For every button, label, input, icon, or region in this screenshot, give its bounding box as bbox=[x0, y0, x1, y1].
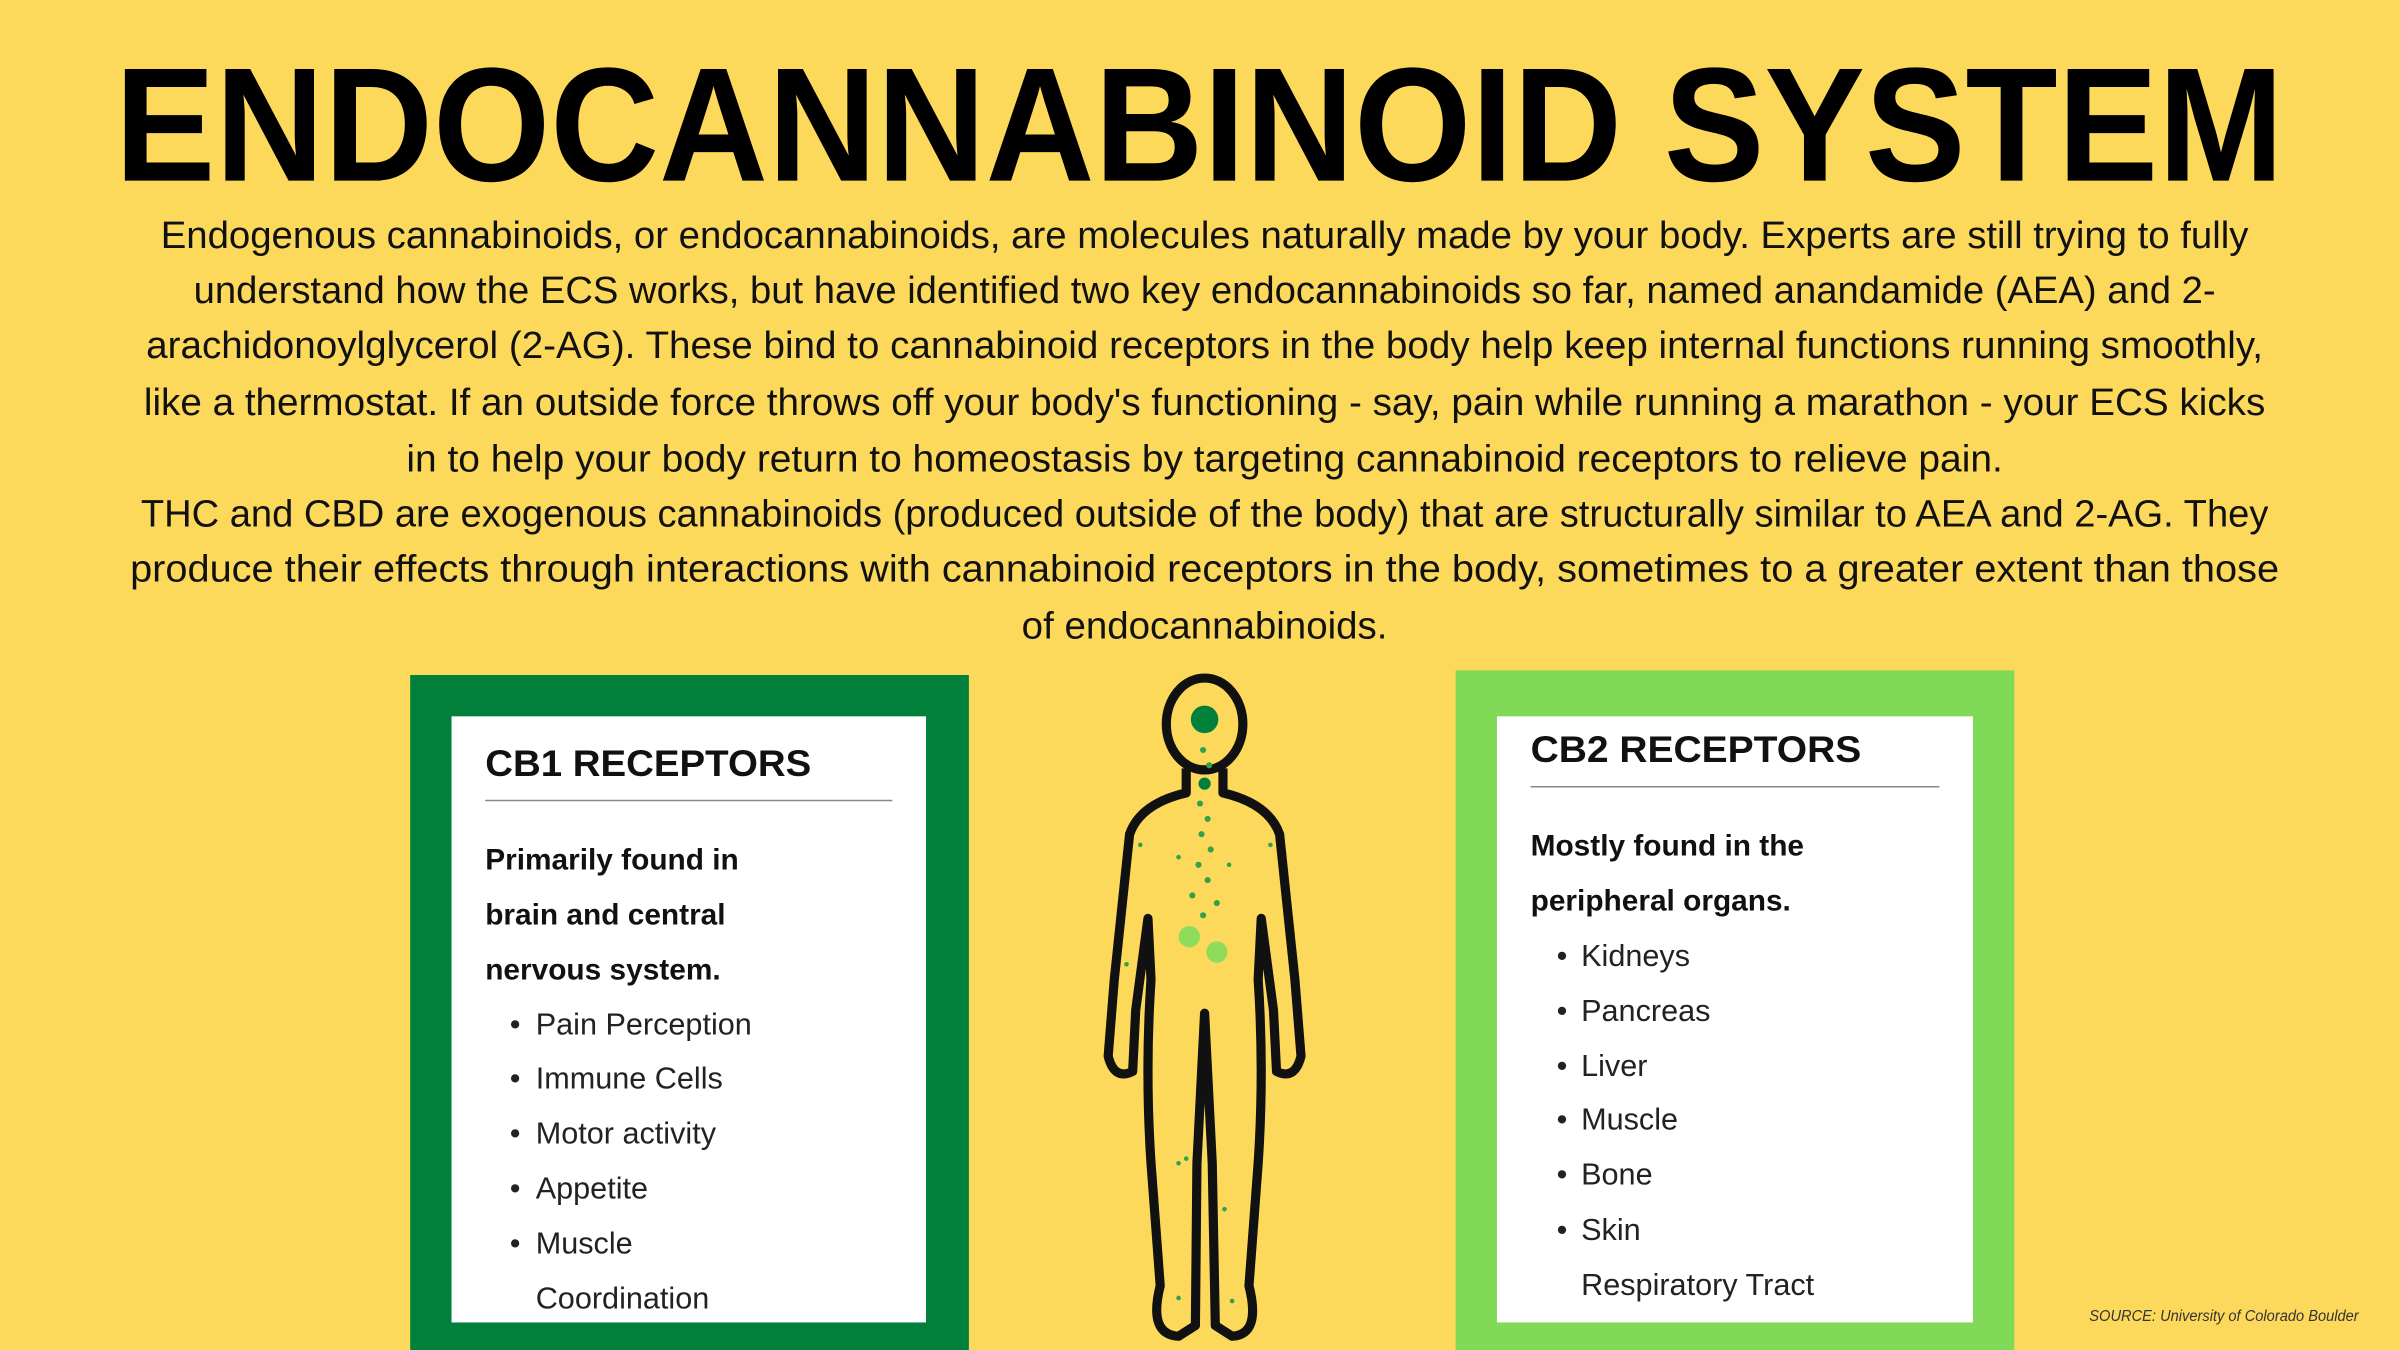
CB1 list: Immune Cells bbox=[536, 1061, 723, 1095]
CB1 list: • bbox=[510, 1061, 520, 1095]
heading: CB2: CB2 RECEPTORS bbox=[1531, 729, 1861, 770]
CB2 list: Bone bbox=[1581, 1158, 1653, 1192]
CB1 description: brain and central bbox=[485, 898, 726, 931]
CB2 list: Pancreas bbox=[1581, 994, 1710, 1028]
panel: CB1 receptors bbox=[410, 675, 969, 1350]
CB2 list: Liver bbox=[1581, 1049, 1647, 1083]
CB1 list: Muscle bbox=[536, 1227, 633, 1261]
CB1 list: • bbox=[510, 1227, 520, 1261]
CB2 list: Skin bbox=[1581, 1213, 1641, 1247]
CB2 list bbox=[1557, 939, 1815, 1302]
CB2 list: • bbox=[1557, 1049, 1567, 1083]
CB1 list: Motor activity bbox=[536, 1116, 717, 1150]
CB2 list: • bbox=[1557, 939, 1567, 973]
CB1 list: • bbox=[510, 1008, 520, 1042]
CB2 list: Kidneys bbox=[1581, 939, 1690, 973]
CB1 list: Pain Perception bbox=[536, 1008, 752, 1042]
CB2 list: • bbox=[1557, 994, 1567, 1028]
panel: CB2 receptors bbox=[1456, 670, 2014, 1350]
intro paragraph: produce their effects through interactions with cannabinoid receptors in the body, sometimes to a greater extent than those bbox=[130, 548, 2279, 591]
CB1 list: Coordination bbox=[536, 1282, 709, 1316]
CB1 list: Appetite bbox=[536, 1171, 648, 1205]
CB2 description: peripheral organs. bbox=[1531, 885, 1791, 918]
CB2 description bbox=[1531, 830, 1804, 918]
intro paragraph: arachidonoylglycerol (2-AG). These bind to cannabinoid receptors in the body help keep internal functions running smoothly, bbox=[146, 324, 2263, 367]
CB2 list: • bbox=[1557, 1103, 1567, 1137]
CB2 list: Respiratory Tract bbox=[1581, 1268, 1815, 1302]
title: ENDOCANNABINOID SYSTEM bbox=[115, 35, 2284, 216]
icon: human body bbox=[1108, 678, 1301, 1336]
intro paragraph: understand how the ECS works, but have identified two key endocannabinoids so far, named anandamide (AEA) and 2- bbox=[194, 269, 2216, 312]
intro paragraph: Endogenous cannabinoids, or endocannabinoids, are molecules naturally made by your body. Experts are still trying to fully bbox=[161, 214, 2249, 257]
CB2 description: Mostly found in the bbox=[1531, 830, 1804, 863]
CB1 list: • bbox=[510, 1116, 520, 1150]
intro paragraph: of endocannabinoids. bbox=[1022, 604, 1387, 647]
CB1 list: • bbox=[510, 1171, 520, 1205]
CB1 list bbox=[510, 1008, 752, 1316]
heading: CB1: CB1 RECEPTORS bbox=[485, 743, 811, 784]
intro paragraph: like a thermostat. If an outside force throws off your body's functioning - say, pain while running a marathon - your ECS kicks bbox=[144, 381, 2265, 424]
CB2 list: Muscle bbox=[1581, 1103, 1678, 1137]
intro paragraph: in to help your body return to homeostasis by targeting cannabinoid receptors to relieve pain. bbox=[406, 437, 2003, 480]
CB1 description: Primarily found in bbox=[485, 843, 739, 876]
intro paragraph bbox=[130, 214, 2279, 647]
CB2 list: • bbox=[1557, 1158, 1567, 1192]
CB2 list: • bbox=[1557, 1213, 1567, 1247]
intro paragraph: THC and CBD are exogenous cannabinoids (produced outside of the body) that are structurally similar to AEA and 2-AG. They bbox=[141, 493, 2269, 536]
CB1 description bbox=[485, 843, 739, 987]
source note: SOURCE: University of Colorado Boulder bbox=[2089, 1308, 2360, 1325]
CB1 description: nervous system. bbox=[485, 954, 721, 987]
